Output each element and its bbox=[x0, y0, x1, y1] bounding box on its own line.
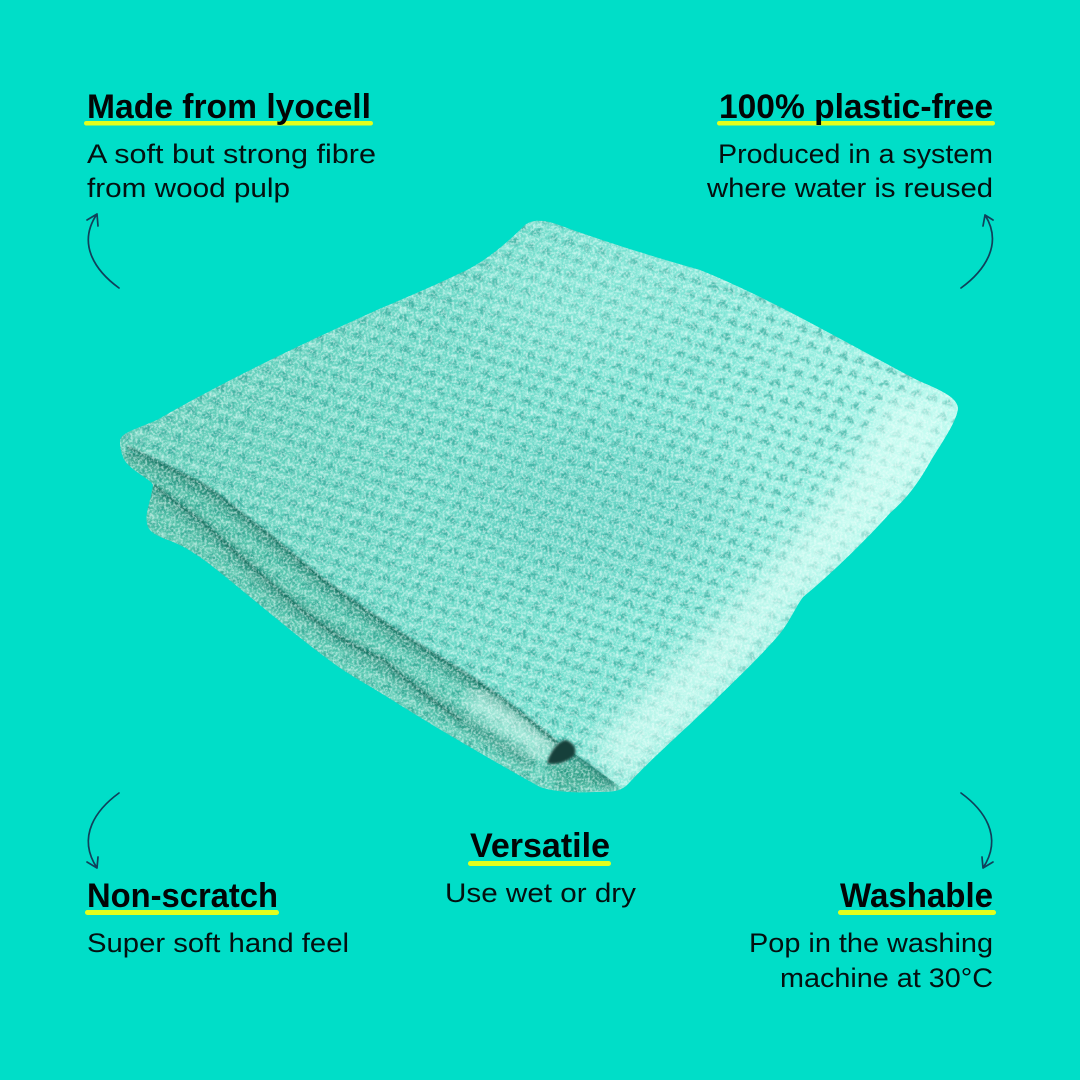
description: A soft but strong fibre bbox=[87, 139, 376, 169]
description: Pop in the washing bbox=[749, 928, 993, 958]
arrow: top right bbox=[961, 215, 993, 288]
heading: Washable bbox=[840, 877, 993, 915]
arrow: top left bbox=[87, 214, 119, 288]
waffle texture bbox=[120, 220, 958, 792]
callout: Versatile bbox=[445, 827, 637, 908]
description: machine at 30°C bbox=[780, 963, 993, 993]
lower folded layers bbox=[123, 450, 622, 792]
dark opening in the fold bbox=[547, 740, 575, 764]
arrow: bottom left bbox=[87, 793, 119, 868]
callout: Washable bbox=[749, 877, 996, 993]
underline bbox=[468, 861, 611, 866]
callout: Non-scratch bbox=[85, 877, 349, 958]
description: Produced in a system bbox=[718, 139, 993, 169]
callout: 100% plastic-free bbox=[706, 88, 995, 203]
underline bbox=[717, 121, 995, 126]
lighting bbox=[470, 245, 958, 790]
dark base under the corner bbox=[545, 763, 612, 790]
underline bbox=[85, 910, 279, 915]
underline bbox=[84, 121, 373, 126]
shadow under second fold bbox=[153, 490, 533, 764]
bright roll near the corner bbox=[470, 695, 552, 755]
underline bbox=[838, 910, 996, 915]
fibre noise over everything bbox=[120, 220, 958, 792]
callout: Made from lyocell bbox=[84, 88, 376, 203]
lower fold line bbox=[153, 485, 460, 720]
heading: Non-scratch bbox=[87, 877, 278, 915]
end crease to the corner bbox=[575, 756, 613, 785]
description: Super soft hand feel bbox=[87, 928, 349, 958]
description: from wood pulp bbox=[87, 173, 290, 203]
shadow under upper fold bbox=[127, 450, 613, 785]
heading: Made from lyocell bbox=[87, 88, 371, 126]
towel photo: folded waffle cloth bbox=[120, 220, 958, 792]
description: Use wet or dry bbox=[445, 878, 637, 908]
heading: 100% plastic-free bbox=[719, 88, 993, 126]
arrow: bottom right bbox=[961, 793, 993, 868]
heading: Versatile bbox=[470, 827, 610, 865]
description: where water is reused bbox=[706, 173, 993, 203]
upper fold line bbox=[127, 447, 557, 743]
